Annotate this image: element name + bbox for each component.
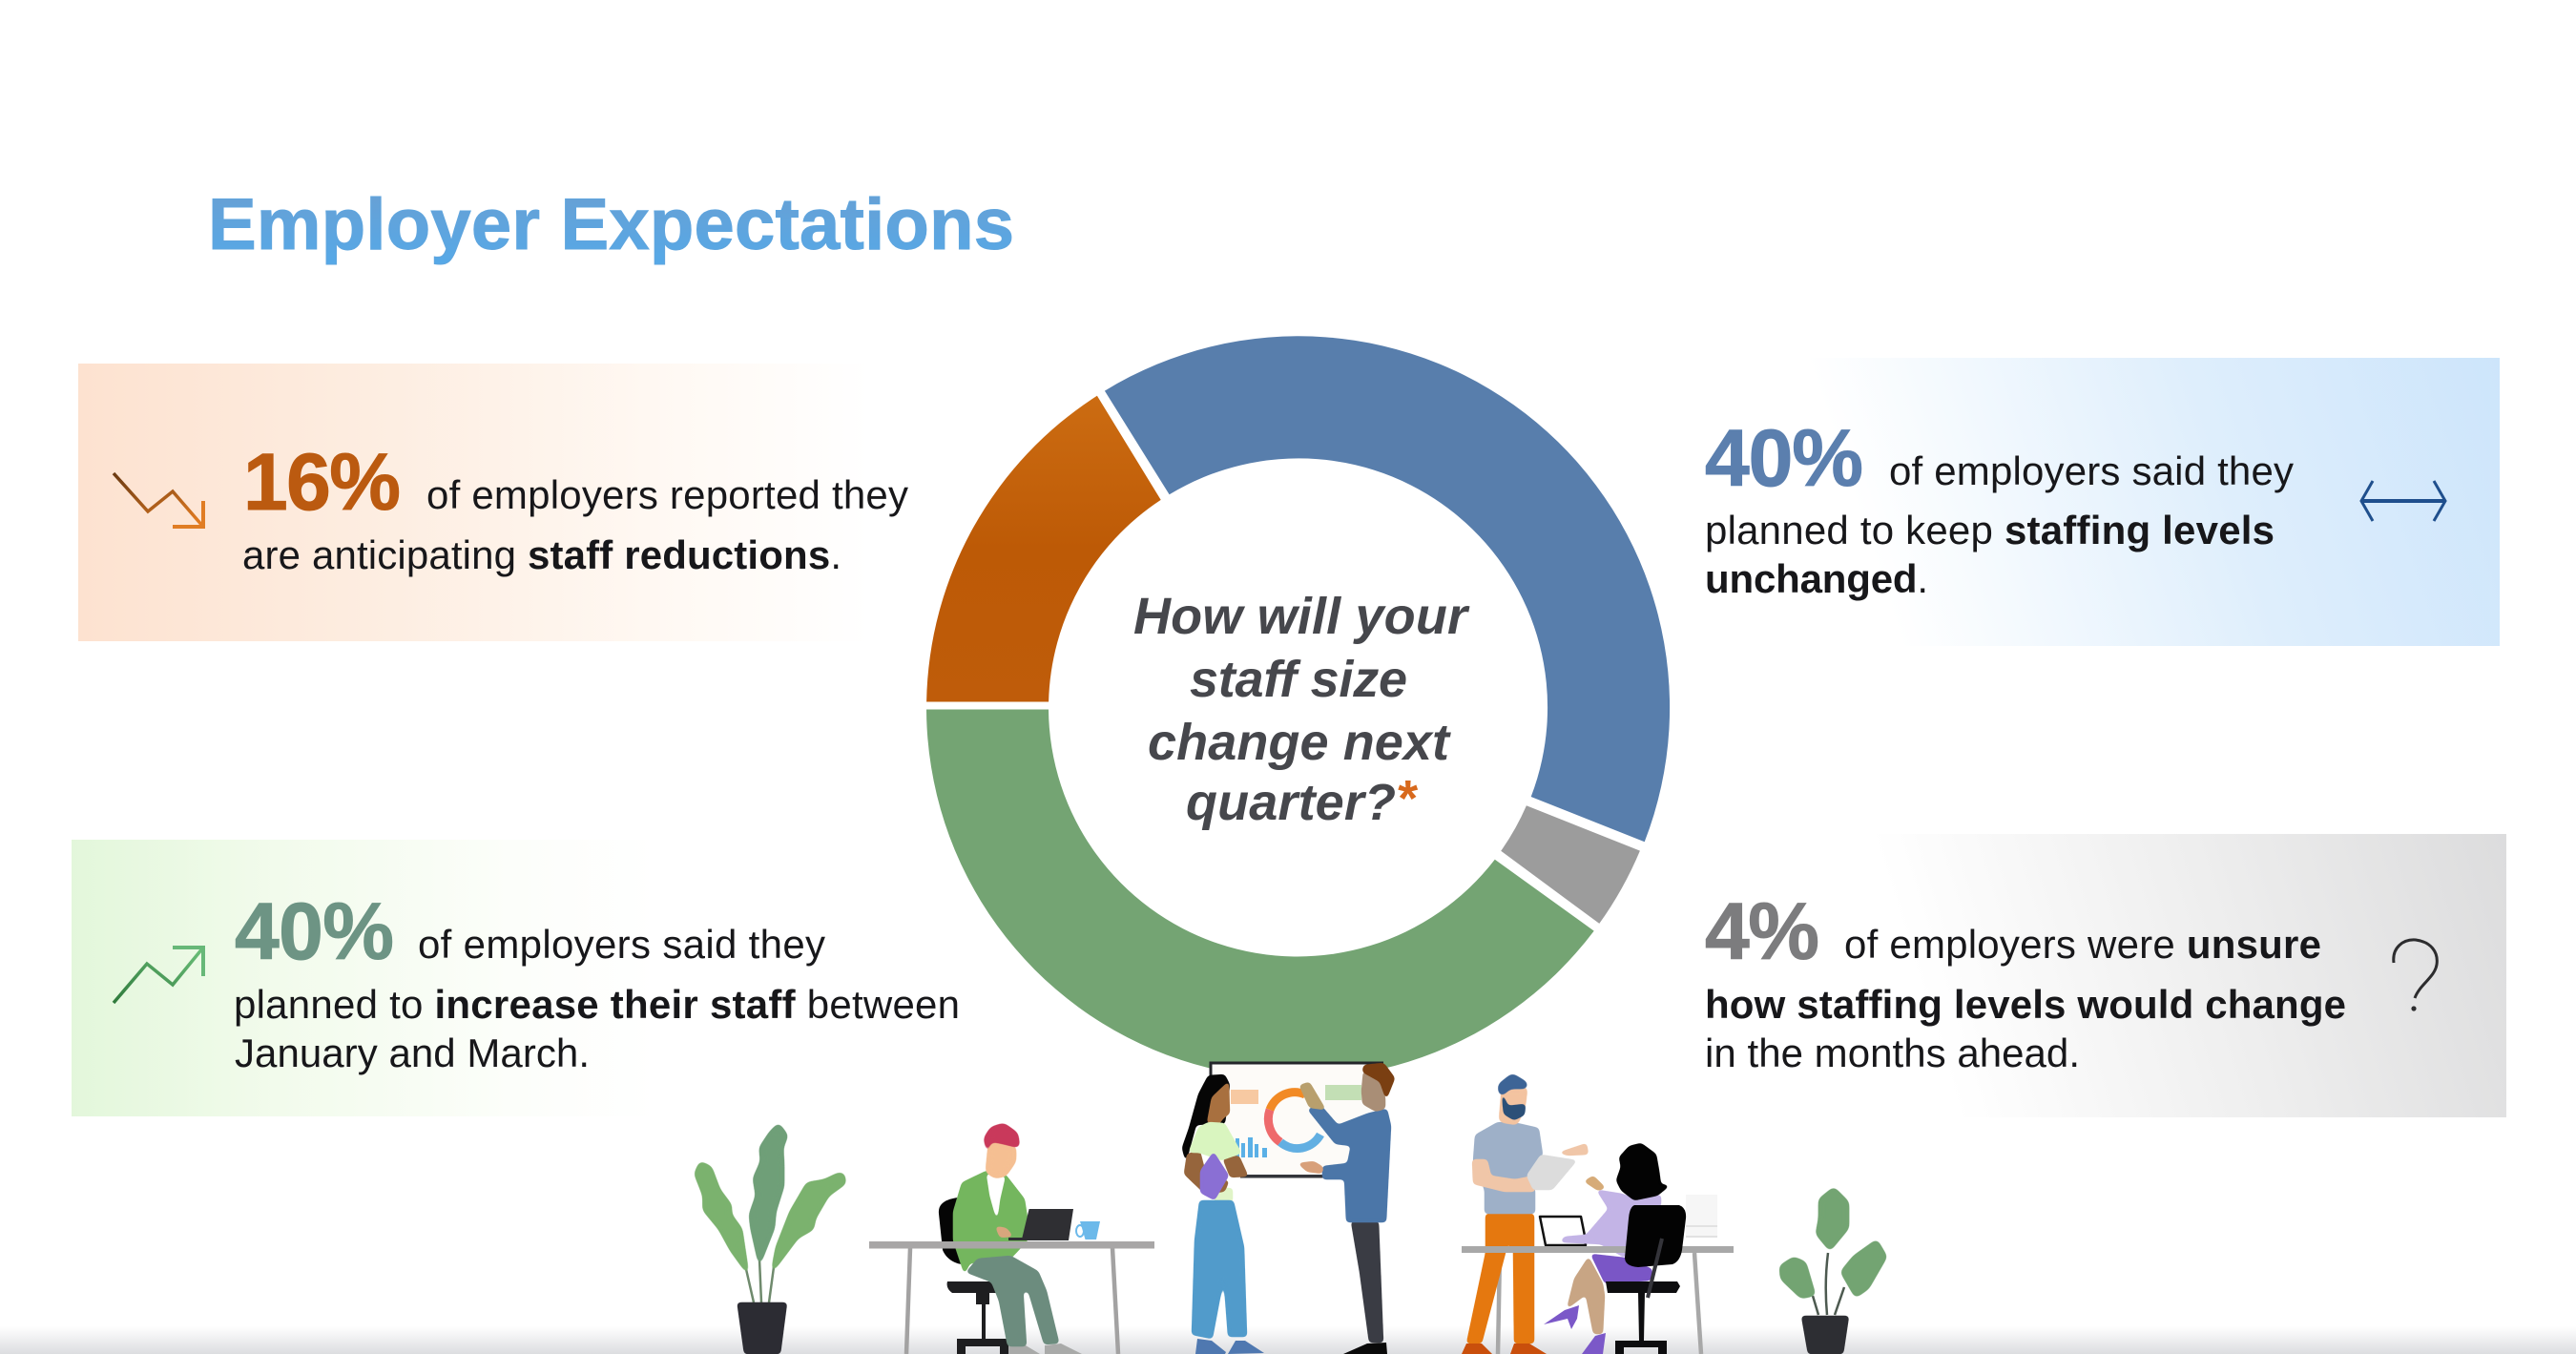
- stat: 4%: 4%: [1705, 886, 1819, 976]
- lower top: [1215, 1188, 1233, 1202]
- shoes: [1008, 1344, 1082, 1354]
- hair: [1499, 1074, 1527, 1094]
- text: unsure line 2: how staffing levels would change: [1705, 982, 2346, 1027]
- left leaf: [1780, 1258, 1815, 1298]
- panel: increase: [72, 840, 960, 1116]
- heel left: [1544, 1305, 1579, 1329]
- hair: [1183, 1075, 1229, 1159]
- text: increase line 2: planned to increase their staff between: [234, 982, 960, 1027]
- skirt: [1590, 1254, 1652, 1283]
- text: staff reductions line 2: are anticipating staff reductions.: [242, 532, 841, 577]
- segment: blue 40%: [1105, 336, 1670, 842]
- leaf right: [772, 1174, 845, 1272]
- chair seat and base: [1606, 1281, 1680, 1354]
- donut centre question: quarter?: [1186, 774, 1396, 831]
- text: unchanged line 2: planned to keep staffing levels: [1705, 508, 2275, 552]
- illustration: left plant: [695, 1124, 845, 1354]
- shoes: [1195, 1339, 1264, 1354]
- face: [1361, 1071, 1385, 1112]
- raised hand: [1584, 1176, 1606, 1191]
- leaf centre: [750, 1124, 787, 1264]
- top leaf: [1817, 1188, 1848, 1250]
- stems: [746, 1260, 774, 1302]
- leaf left: [695, 1162, 748, 1274]
- pot: [1801, 1316, 1849, 1354]
- segment: gray 4%: [1501, 805, 1640, 924]
- chair strut: [1648, 1239, 1662, 1298]
- panel: unchanged: [1705, 358, 2500, 646]
- donut centre question: change next: [1148, 714, 1451, 771]
- hair: [1363, 1064, 1394, 1097]
- stems: [1813, 1253, 1844, 1315]
- heel right: [1582, 1333, 1606, 1354]
- segment: orange 16%: [926, 396, 1161, 702]
- floor shadow: [0, 1326, 2576, 1354]
- trousers: [1351, 1221, 1383, 1343]
- text: increase line 3: January and March.: [235, 1031, 590, 1075]
- board surface: [1211, 1063, 1383, 1177]
- illustration: man presenting: [1298, 1064, 1394, 1354]
- hair: [985, 1124, 1019, 1153]
- text: increase line 1: of employers said they: [418, 922, 825, 967]
- extended arm: [1558, 1143, 1589, 1156]
- top: [1190, 1123, 1240, 1159]
- chair back: [939, 1198, 964, 1264]
- stat: 16%: 16%: [243, 437, 401, 527]
- text: staff reductions line 1: of employers reported they: [426, 472, 908, 517]
- illustration: bearded man and seated woman at desk: [1462, 1074, 1734, 1354]
- segment: green 40%: [926, 710, 1594, 1079]
- board frame: [1211, 1063, 1383, 1083]
- laptop: [1008, 1209, 1073, 1240]
- donut centre question: [1133, 588, 1470, 831]
- shirt: [1474, 1123, 1542, 1213]
- lower hand: [1298, 1161, 1323, 1174]
- torso: [954, 1172, 1028, 1272]
- text: unchanged line 1: of employers said they: [1889, 448, 2294, 493]
- donut centre question: *: [1396, 770, 1419, 827]
- illustration: woman presenting: [1183, 1075, 1264, 1354]
- panel: unsure: [1705, 834, 2506, 1117]
- icon: trend down arrow: [114, 473, 203, 527]
- jeans: [1193, 1201, 1246, 1338]
- donut centre question: staff size: [1190, 651, 1407, 708]
- title: Employer Expectations: [208, 184, 1014, 265]
- head: [987, 1140, 1015, 1177]
- blouse: [1562, 1191, 1660, 1257]
- desk top: [869, 1241, 1154, 1248]
- laptop: [1540, 1217, 1586, 1245]
- book: [1200, 1152, 1229, 1200]
- text: unsure line 3: in the months ahead.: [1705, 1031, 2080, 1075]
- trousers: [967, 1257, 1058, 1345]
- donut chart: [926, 336, 1670, 1079]
- stat: 40% green: 40%: [235, 886, 394, 976]
- arms: [1185, 1152, 1228, 1193]
- jacket: [1309, 1105, 1390, 1221]
- faint papers: [1686, 1195, 1717, 1238]
- shirt: [987, 1174, 1006, 1221]
- desk legs: [1498, 1253, 1701, 1354]
- chair seat: [947, 1281, 1008, 1354]
- stat: 40% blue: 40%: [1705, 413, 1863, 503]
- donut centre question: How will your: [1133, 588, 1470, 645]
- head: [1500, 1088, 1527, 1124]
- orange note: [1231, 1090, 1258, 1104]
- face: [1207, 1081, 1230, 1124]
- text: unchanged line 3: unchanged.: [1705, 556, 1928, 601]
- beard: [1503, 1095, 1525, 1119]
- illustration: right plant: [1780, 1188, 1886, 1354]
- green note: [1325, 1085, 1361, 1100]
- shoe: [1343, 1343, 1387, 1354]
- desk legs: [906, 1248, 1118, 1354]
- icon: double arrow: [2361, 481, 2445, 521]
- panel: staff reductions: [78, 364, 908, 641]
- hair: [1617, 1144, 1668, 1199]
- pot: [737, 1302, 787, 1354]
- cup: [1076, 1221, 1100, 1239]
- chair back: [1625, 1205, 1686, 1267]
- text: unsure line 1: of employers were unsure: [1844, 922, 2321, 967]
- orange trousers: [1466, 1214, 1534, 1344]
- legs: [1567, 1257, 1605, 1334]
- desk top: [1462, 1246, 1734, 1253]
- illustration: whiteboard: [1211, 1063, 1383, 1177]
- right leaf: [1841, 1240, 1886, 1297]
- icon: trend up arrow: [114, 948, 203, 1003]
- forearm: [1473, 1160, 1534, 1191]
- raised hand: [1300, 1083, 1324, 1109]
- mini donut: [1268, 1093, 1320, 1149]
- hand: [995, 1226, 1013, 1238]
- board ledge: [1240, 1175, 1326, 1177]
- icon: question mark: [2394, 940, 2437, 1011]
- mini bars: [1236, 1137, 1267, 1157]
- shoes: [1462, 1344, 1547, 1354]
- illustration: seated man at desk: [869, 1124, 1154, 1354]
- paper: [1527, 1155, 1577, 1190]
